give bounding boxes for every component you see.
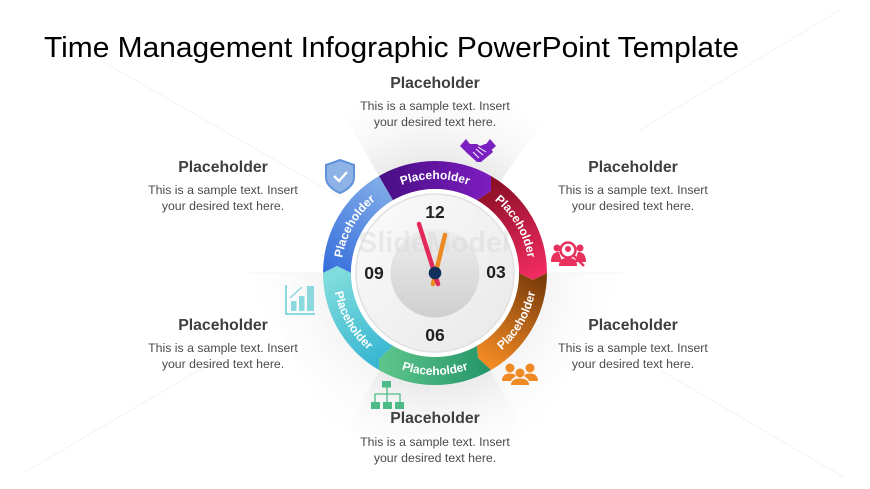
- text block: upper right: your desired text here.: [572, 199, 694, 213]
- segment: blue: [323, 176, 393, 273]
- icon: shield: [326, 160, 354, 193]
- text block: top: your desired text here.: [374, 115, 496, 129]
- text block: upper left: your desired text here.: [162, 199, 284, 213]
- segment: purple: Placeholder: [400, 170, 470, 185]
- text block: lower right: [558, 317, 708, 371]
- segment: green: Placeholder: [402, 362, 467, 375]
- segment: teal: Placeholder: [335, 291, 372, 349]
- text block: lower right: Placeholder: [588, 317, 678, 334]
- clock face: [351, 189, 519, 357]
- segment: orange: Placeholder: [496, 291, 535, 350]
- icon: bar chart: [286, 285, 315, 314]
- segment: teal: [323, 266, 393, 370]
- icon: handshake: [460, 139, 496, 162]
- text block: lower left: Placeholder: [178, 317, 268, 334]
- text block: upper left: [148, 159, 298, 213]
- text block: bottom: Placeholder: [390, 410, 480, 427]
- text block: lower right: your desired text here.: [572, 357, 694, 371]
- text block: lower right: This is a sample text. Insert: [558, 341, 708, 355]
- segment: blue: Placeholder: [334, 195, 374, 258]
- segment: red: [477, 176, 547, 280]
- hour numbers: 06: [425, 325, 445, 345]
- orange hand: [433, 235, 445, 284]
- icon: people search: [551, 242, 586, 266]
- inner dial: [390, 228, 480, 318]
- text block: top: This is a sample text. Insert: [360, 99, 510, 113]
- text block: lower left: [148, 317, 298, 371]
- hour numbers: [364, 202, 506, 345]
- segment: orange: [477, 273, 547, 370]
- text block: lower left: your desired text here.: [162, 357, 284, 371]
- hour numbers: 09: [364, 263, 384, 283]
- title: Time Management Infographic PowerPoint Template: [44, 32, 739, 64]
- red hand: [419, 224, 438, 284]
- segment: red: Placeholder: [495, 194, 534, 257]
- segment: green: [379, 346, 491, 385]
- segment: purple: [379, 161, 491, 200]
- icon: org chart: [371, 381, 404, 409]
- text block: top: Placeholder: [390, 75, 480, 92]
- text block: lower left: This is a sample text. Insert: [148, 341, 298, 355]
- text block: upper left: Placeholder: [178, 159, 268, 176]
- text block: upper right: This is a sample text. Insert: [558, 183, 708, 197]
- text block: bottom: [360, 410, 510, 465]
- text block: bottom: your desired text here.: [374, 451, 496, 465]
- text block: upper right: Placeholder: [588, 159, 678, 176]
- text block: top: [360, 75, 510, 129]
- text block: upper right: [558, 159, 708, 213]
- text block: upper left: This is a sample text. Insert: [148, 183, 298, 197]
- hour numbers: 12: [425, 202, 445, 222]
- hub: [429, 267, 441, 279]
- text block: bottom: This is a sample text. Insert: [360, 435, 510, 449]
- icon: team: [502, 364, 538, 385]
- ring segments: [323, 161, 547, 385]
- hour numbers: 03: [486, 262, 506, 282]
- watermark: SlideModel: [358, 227, 510, 259]
